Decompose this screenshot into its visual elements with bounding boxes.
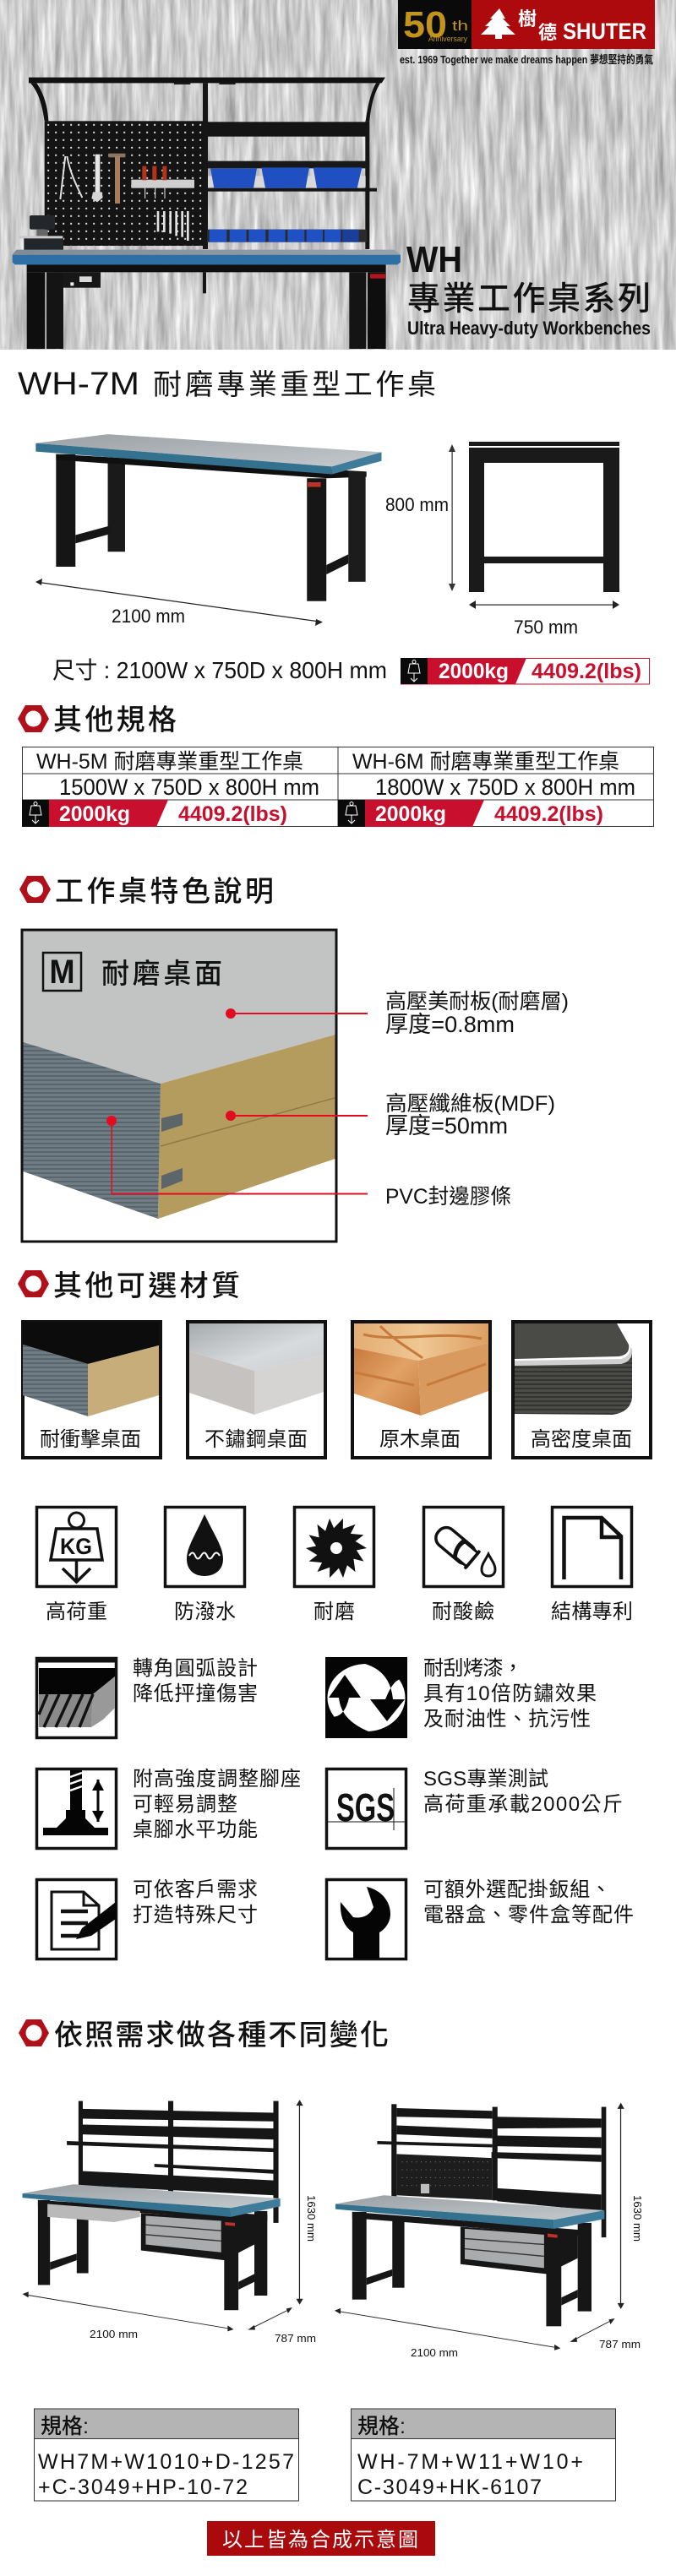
- feature text: scratch resistant paint: [423, 1657, 597, 1731]
- logo: 50th anniversary and SHUTER: 50: [403, 4, 447, 46]
- icon: patent document: [553, 1507, 632, 1586]
- panel: tabletop cross section: [22, 930, 368, 1242]
- dimension arrows 2: [335, 2102, 624, 2350]
- spec: WH-6M: [338, 750, 635, 827]
- material: 原木桌面: [352, 1322, 490, 1458]
- callout text: laminate: [385, 990, 569, 1037]
- feature text: adjustable foot: 桌腳水平功能: [133, 1818, 258, 1841]
- label: 防潑水: 防潑水: [174, 1600, 236, 1623]
- section heading: 其他規格: 其他規格: [53, 704, 177, 736]
- arrow: 800 mm: [449, 444, 455, 591]
- feature text: custom size: 可依客戶需求: [133, 1878, 258, 1901]
- spec box 1: [34, 2409, 299, 2501]
- load badge: 4409.2(lbs): [532, 660, 641, 683]
- hero series title: [406, 239, 651, 339]
- spec box 1: WH7M+W1010+D-1257: [38, 2450, 294, 2474]
- logo: 50th anniversary and SHUTER: 德: [538, 22, 557, 43]
- callout line: PVC: [106, 1116, 368, 1194]
- callout line: MDF: [226, 1111, 368, 1121]
- material: 耐衝擊桌面: [23, 1322, 161, 1458]
- feature text: SGS test: 高荷重承載2000公斤: [423, 1793, 623, 1816]
- product title: WH-7M: [18, 367, 139, 402]
- feature text: adjustable foot: 附高強度調整腳座: [133, 1768, 301, 1791]
- feature: adjustable foot: [37, 1769, 117, 1848]
- spec: WH-6M: WH-6M 耐磨專業重型工作桌: [352, 750, 619, 774]
- load badge: 2000kg: [439, 660, 509, 683]
- feature: rounded corner: [37, 1659, 117, 1738]
- feature text: rounded corner: [133, 1657, 258, 1705]
- feature: optional accessories: [326, 1880, 406, 1959]
- material: 不鏽鋼桌面: [188, 1322, 325, 1458]
- spec box 1: +C-3049+HP-10-72: [38, 2475, 248, 2499]
- callout text: MDF: [385, 1092, 555, 1139]
- material: 耐衝擊桌面: 耐衝擊桌面: [40, 1428, 141, 1451]
- label: 1630 mm: 1630 mm: [631, 2195, 644, 2242]
- icon: M badge: M: [49, 954, 74, 991]
- callout text: laminate: 高壓美耐板(耐磨層): [385, 990, 569, 1014]
- dimension arrows 1: [23, 2100, 303, 2331]
- workbench WH-7M perspective view: [35, 434, 382, 601]
- label: 結構專利: 結構專利: [551, 1600, 633, 1623]
- feature text: optional accessories: 可額外選配掛鈑組、: [423, 1878, 611, 1901]
- hero banner: [0, 0, 676, 350]
- spec: WH-5M: WH-5M 耐磨專業重型工作桌: [36, 750, 303, 774]
- label: 787 mm: 787 mm: [599, 2338, 641, 2350]
- callout text: PVC: PVC封邊膠條: [385, 1185, 511, 1209]
- label: 耐酸鹼: 耐酸鹼: [432, 1600, 494, 1623]
- spec: WH-5M: 4409.2(lbs): [178, 802, 287, 826]
- spec box 1: 規格:: [41, 2415, 89, 2438]
- icon: heavy load: [37, 1507, 117, 1586]
- feature: SGS test: SGS: [336, 1785, 395, 1829]
- label: 耐磨: 耐磨: [313, 1600, 355, 1623]
- feature: scratch resistant paint: [325, 1657, 407, 1738]
- feature text: optional accessories: [423, 1878, 634, 1927]
- spec box 2: C-3049+HK-6107: [357, 2475, 542, 2499]
- icon: acid and alkali: [424, 1507, 504, 1586]
- icon: weight: [408, 660, 420, 682]
- workbench front view: [469, 442, 619, 592]
- spec: WH-6M: 2000kg: [375, 802, 446, 826]
- feature: SGS test: [326, 1769, 406, 1848]
- hero series title: WH: [406, 239, 462, 280]
- material: 原木桌面: 原木桌面: [379, 1428, 461, 1451]
- feature text: optional accessories: 電器盒、零件盒等配件: [423, 1904, 634, 1927]
- logo: 50th anniversary and SHUTER: th: [452, 18, 468, 34]
- feature text: custom size: 打造特殊尺寸: [133, 1904, 258, 1927]
- arrow: 750 mm: [469, 601, 619, 609]
- PVC edge strip: [24, 1042, 161, 1219]
- callout text: laminate: 厚度=0.8mm: [385, 1012, 515, 1037]
- icon: heavy load: KG: [60, 1534, 92, 1559]
- load badge: [401, 658, 649, 684]
- label: 800 mm: 800 mm: [385, 494, 449, 515]
- spec: WH-5M: 1500W x 750D x 800H mm: [59, 774, 319, 800]
- feature text: SGS test: SGS專業測試: [423, 1768, 548, 1791]
- spec box 2: 規格:: [357, 2415, 406, 2438]
- logo: 50th anniversary and SHUTER: Anniversary: [428, 35, 467, 43]
- spec: WH-6M: 1800W x 750D x 800H mm: [375, 774, 635, 800]
- label: 750 mm: 750 mm: [514, 617, 578, 638]
- feature text: adjustable foot: [133, 1768, 301, 1841]
- hero series title: 專業工作桌系列: [407, 281, 651, 318]
- section heading: 其他可選材質: 其他可選材質: [53, 1270, 240, 1302]
- spec box 2: WH-7M+W11+W10+: [357, 2450, 583, 2474]
- concrete wall background: [0, 0, 676, 350]
- material: 高密度桌面: [513, 1322, 651, 1458]
- hero series title: Ultra Heavy-duty Workbenches: [407, 318, 651, 339]
- feature text: scratch resistant paint: 及耐油性、抗污性: [423, 1708, 591, 1731]
- product title: [18, 367, 436, 402]
- label: 1630 mm: 1630 mm: [305, 2195, 318, 2242]
- label: 787 mm: 787 mm: [275, 2332, 316, 2345]
- arrow: 2100 mm: [35, 579, 323, 626]
- feature text: scratch resistant paint: 具有10倍防鏽效果: [423, 1682, 597, 1705]
- material: 不鏽鋼桌面: 不鏽鋼桌面: [204, 1428, 308, 1451]
- label: 高荷重: 高荷重: [46, 1600, 107, 1623]
- spec: WH-5M: [22, 750, 319, 827]
- workbench configuration 2: [335, 2104, 606, 2326]
- section heading: 依照需求做各種不同變化: 依照需求做各種不同變化: [54, 2019, 389, 2052]
- laminate surface: [24, 931, 335, 1084]
- footnote button: [207, 2521, 435, 2556]
- feature text: adjustable foot: 可輕易調整: [133, 1793, 237, 1816]
- feature text: SGS test: [423, 1768, 623, 1816]
- callout text: MDF: 高壓纖維板(MDF): [385, 1092, 555, 1116]
- workbench configuration 1: [23, 2101, 281, 2310]
- panel label: 耐磨桌面: [101, 958, 222, 989]
- spec: WH-6M: 4409.2(lbs): [494, 802, 603, 826]
- MDF core: [158, 1035, 335, 1219]
- feature: custom size: [37, 1880, 117, 1959]
- material: 高密度桌面: 高密度桌面: [531, 1428, 632, 1451]
- logo: 50th anniversary and SHUTER: SHUTER: [563, 19, 646, 44]
- label: 2100 mm: 2100 mm: [411, 2346, 458, 2359]
- icon: saw blade: [294, 1507, 373, 1586]
- feature text: scratch resistant paint: 耐刮烤漆，: [423, 1657, 523, 1680]
- overall size: 尺寸 : 2100W x 750D x 800H mm: [52, 657, 387, 683]
- spec: WH-5M: 2000kg: [59, 802, 130, 826]
- callout line: laminate: [226, 1008, 368, 1019]
- feature text: custom size: [133, 1878, 258, 1927]
- specification table: [22, 747, 654, 827]
- spec box 2: [352, 2409, 615, 2501]
- logo: 50th anniversary and SHUTER: [398, 0, 655, 49]
- callout text: MDF: 厚度=50mm: [385, 1113, 508, 1139]
- label: 2100 mm: 2100 mm: [112, 606, 185, 627]
- workbench with pegboard rack: [13, 78, 401, 349]
- section heading: 工作桌特色說明: 工作桌特色說明: [55, 876, 274, 908]
- logo: 50th anniversary and SHUTER: 樹: [518, 8, 537, 30]
- label: 2100 mm: 2100 mm: [90, 2328, 138, 2340]
- footnote button: 以上皆為合成示意圖: [222, 2529, 418, 2552]
- feature text: rounded corner: 降低抨撞傷害: [133, 1682, 258, 1705]
- feature text: rounded corner: 轉角圓弧設計: [133, 1657, 258, 1680]
- product title: 耐磨專業重型工作桌: [153, 369, 436, 401]
- icon: water proof: [166, 1507, 245, 1586]
